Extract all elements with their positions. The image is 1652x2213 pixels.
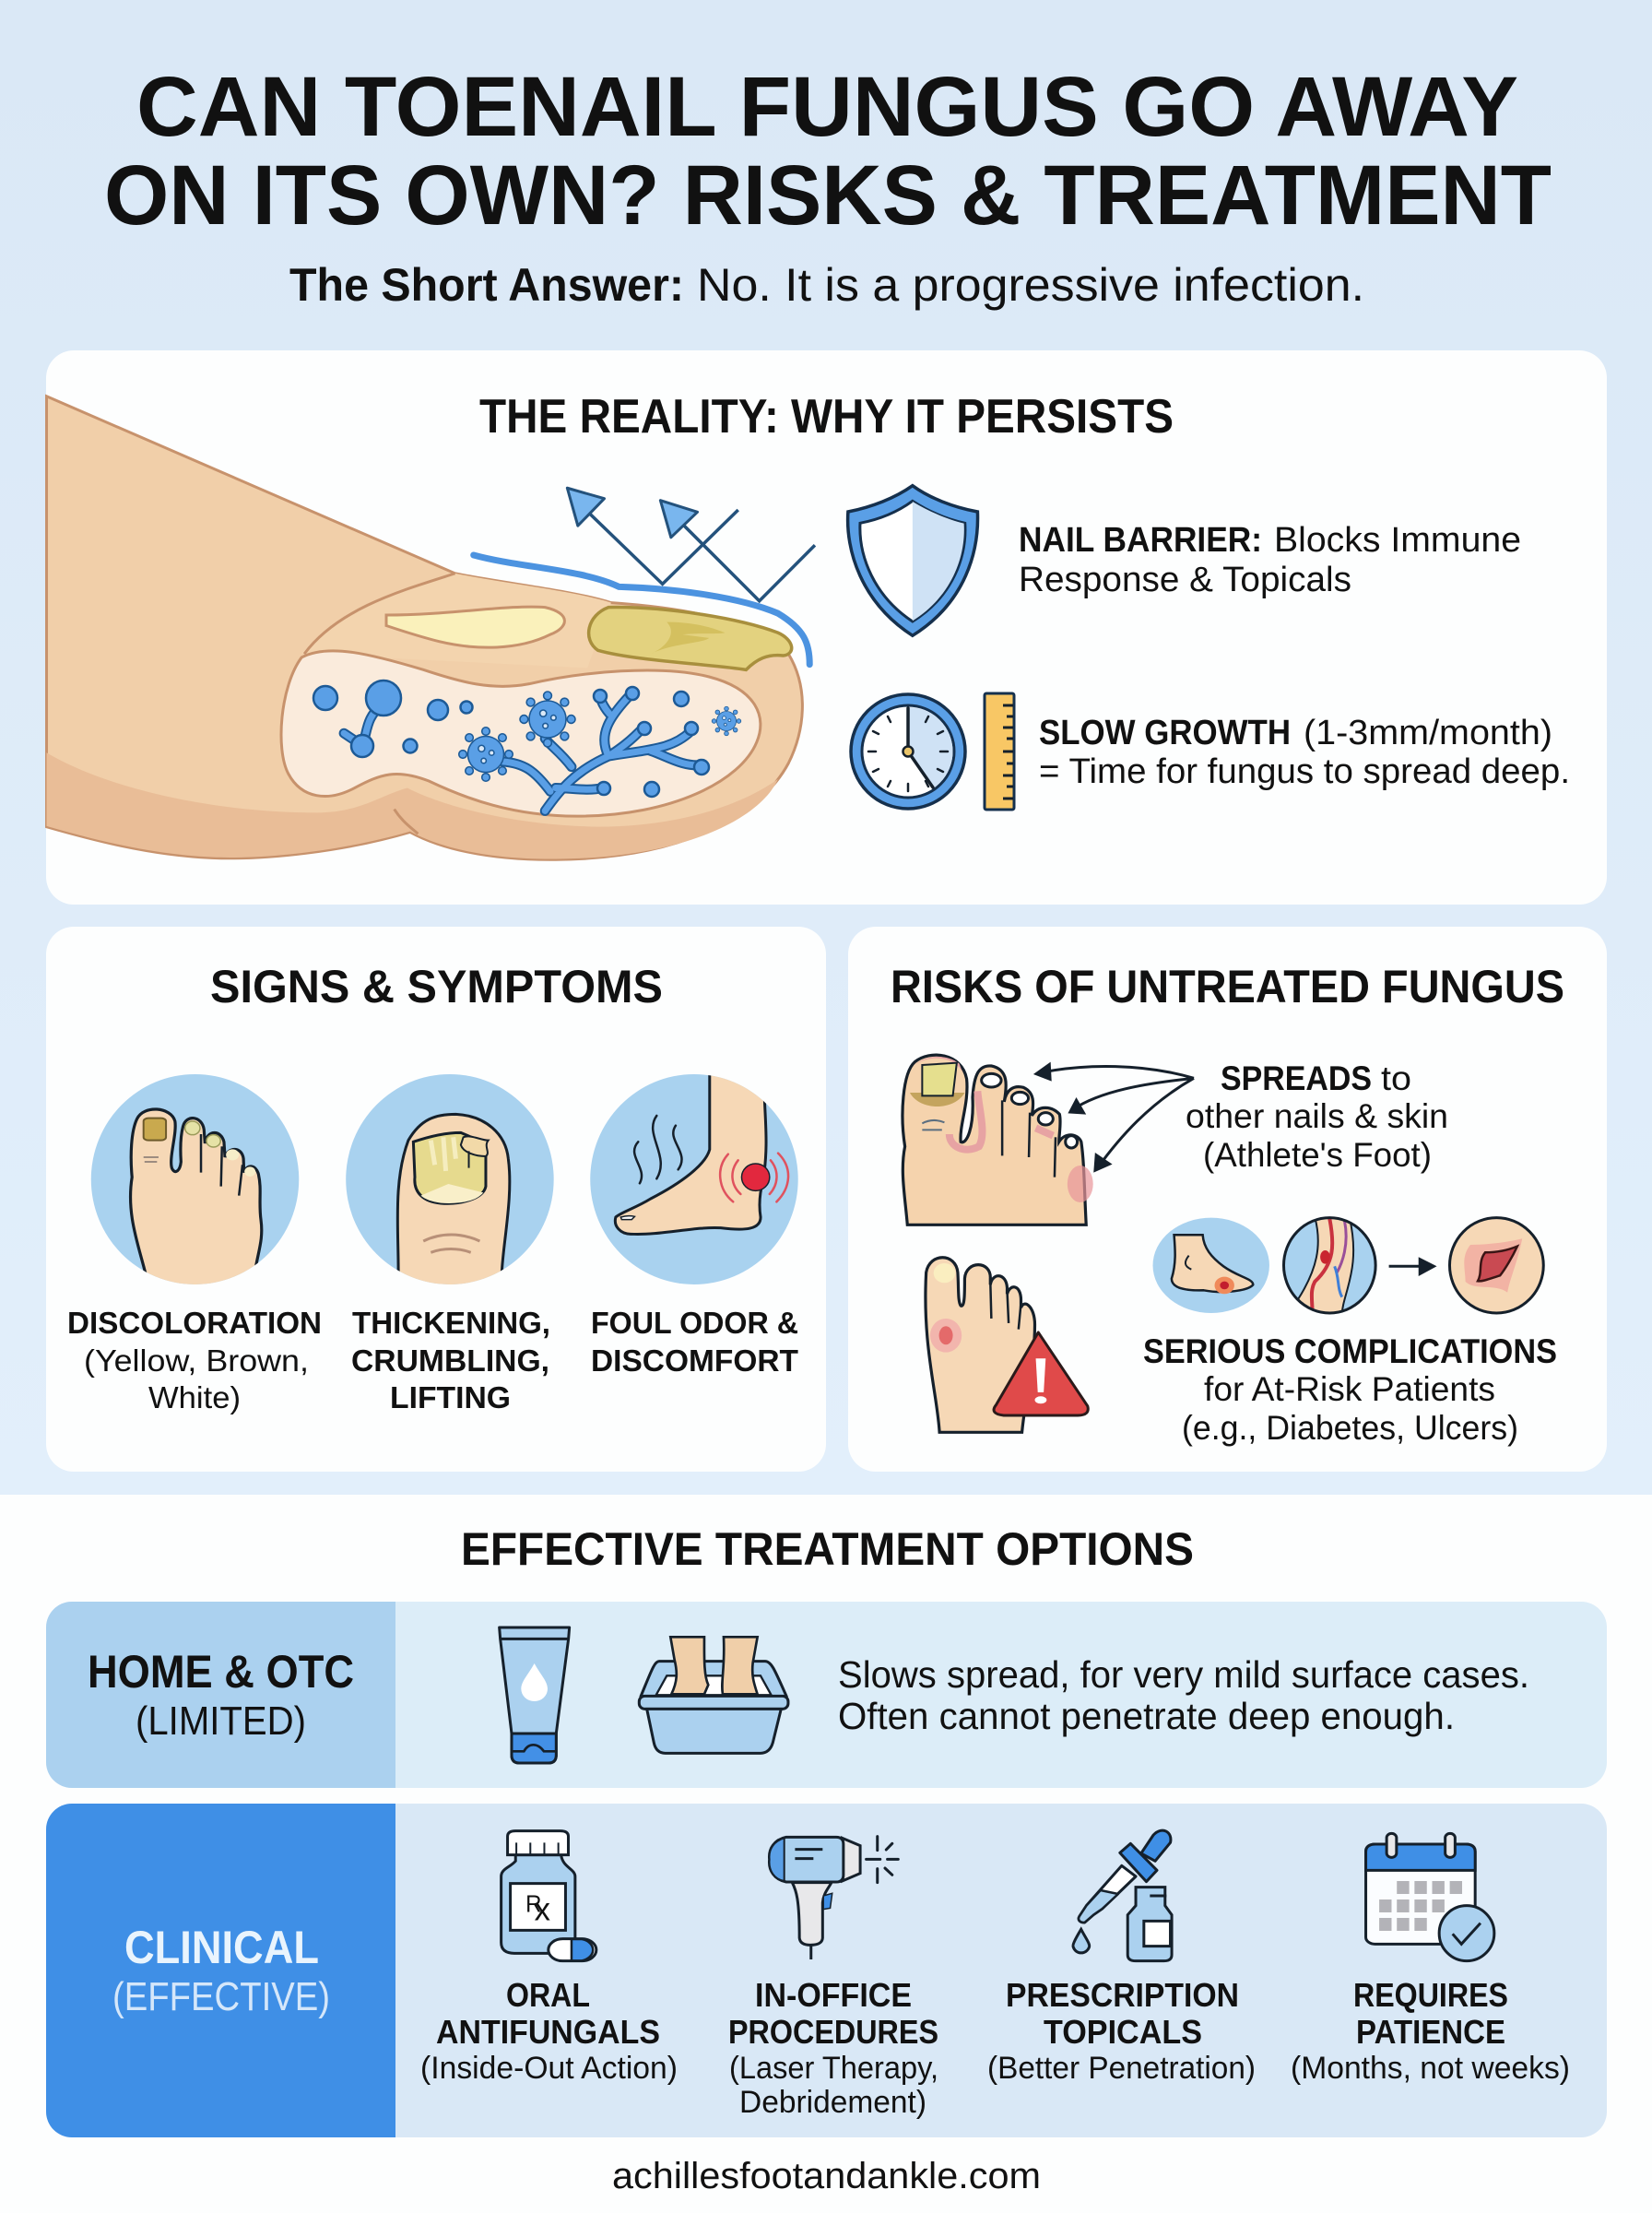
row: clinical	[46, 1804, 1607, 2137]
label: foul odor: FOUL ODOR &	[591, 1306, 798, 1340]
label: in-office procedures: (Laser Therapy,	[729, 2051, 938, 2086]
text: nail barrier: NAIL BARRIER:	[1019, 521, 1262, 560]
icon: prescription bottle: x	[535, 1891, 550, 1927]
text: slow growth: SLOW GROWTH	[1039, 714, 1291, 752]
title: ON ITS OWN? RISKS & TREATMENT	[104, 148, 1552, 243]
icon: discolored toes	[91, 1074, 299, 1288]
label: prescription topicals: PRESCRIPTION	[1006, 1976, 1239, 2014]
label: foul odor: DISCOMFORT	[591, 1343, 798, 1378]
text: spreads: to	[1381, 1059, 1411, 1097]
heading: signs and symptoms: SIGNS & SYMPTOMS	[210, 961, 663, 1012]
text: nail barrier: Response & Topicals	[1019, 561, 1351, 599]
icons: foot ulcer, vessels, wound progression	[1153, 1217, 1543, 1316]
icon: prescription bottle: R	[525, 1891, 541, 1917]
text: nail barrier: Blocks Immune	[1274, 521, 1521, 560]
text: home treatment description	[838, 1653, 1529, 1737]
label: oral antifungals: ORAL	[506, 1976, 590, 2014]
label: oral antifungals: ANTIFUNGALS	[436, 2013, 660, 2051]
text: slow growth: (1-3mm/month)	[1304, 714, 1552, 752]
lower white section background	[0, 1495, 1652, 2213]
text: home treatment description: Slows spread, for very mild surface cases.	[838, 1653, 1529, 1696]
text: serious complications: SERIOUS COMPLICATIONS	[1143, 1332, 1557, 1370]
label: requires patience	[1291, 1976, 1570, 2086]
label: oral antifungals: (Inside-Out Action)	[420, 2051, 678, 2086]
panel: risks of untreated fungus	[848, 927, 1607, 1472]
icon: dropper and bottle	[1073, 1830, 1172, 1961]
label: prescription topicals: (Better Penetration)	[987, 2051, 1256, 2086]
label: foul odor	[591, 1306, 798, 1378]
page background	[0, 0, 1652, 1498]
text: spreads	[1186, 1059, 1448, 1174]
text: spreads: (Athlete's Foot)	[1203, 1136, 1432, 1174]
text: spreads: other nails & skin	[1186, 1097, 1448, 1135]
label: thickening	[351, 1306, 550, 1414]
heading: the reality: THE REALITY: WHY IT PERSISTS	[479, 390, 1174, 444]
text: serious complications	[1143, 1332, 1557, 1447]
subtitle: short answer: The Short Answer:	[289, 259, 684, 311]
label: prescription topicals: TOPICALS	[1044, 2013, 1202, 2051]
text: slow growth	[1039, 714, 1570, 791]
panel: signs and symptoms	[46, 927, 826, 1472]
label: in-office procedures: PROCEDURES	[728, 2013, 938, 2051]
icon: foot with odor and heel pain	[590, 1067, 798, 1284]
label: in-office procedures: Debridement)	[739, 2085, 926, 2120]
label: in-office procedures	[728, 1976, 938, 2120]
text: serious complications: (e.g., Diabetes, Ulcers)	[1182, 1409, 1518, 1447]
label: oral antifungals	[420, 1976, 678, 2086]
label: requires patience: PATIENCE	[1356, 2013, 1505, 2051]
row: home and OTC	[46, 1602, 1607, 1788]
label: requires patience: REQUIRES	[1353, 1976, 1508, 2014]
icon: at-risk foot with warning triangle	[926, 1258, 1088, 1432]
label: thickening: THICKENING,	[352, 1306, 550, 1340]
label: discoloration: DISCOLORATION	[67, 1306, 322, 1340]
label: home and OTC: HOME & OTC	[88, 1646, 354, 1698]
heading: risks: RISKS OF UNTREATED FUNGUS	[891, 961, 1564, 1012]
label: clinical: (EFFECTIVE)	[112, 1974, 330, 2019]
heading: effective treatment options: EFFECTIVE TREATMENT OPTIONS	[461, 1523, 1194, 1575]
title: CAN TOENAIL FUNGUS GO AWAY	[136, 60, 1518, 154]
footer website: achillesfootandankle.com	[612, 2156, 1041, 2196]
icon: infected toes with spread arrows	[903, 1055, 1194, 1225]
icon: shield	[848, 486, 978, 635]
subtitle: short answer	[289, 259, 1364, 311]
icon: clock	[851, 694, 965, 809]
label: clinical: CLINICAL	[124, 1922, 319, 1973]
text: nail barrier	[1019, 521, 1521, 599]
title	[104, 60, 1552, 243]
icon: foot soak basin	[639, 1637, 788, 1753]
icon: laser device	[769, 1837, 898, 1959]
text: serious complications: for At-Risk Patients	[1204, 1370, 1495, 1408]
icon: calendar with check	[1366, 1833, 1494, 1961]
subtitle: short answer: No. It is a progressive infection.	[697, 259, 1364, 311]
icon: thickened nail	[346, 1074, 554, 1288]
text: home treatment description: Often cannot penetrate deep enough.	[838, 1695, 1455, 1737]
label: discoloration: White)	[148, 1380, 241, 1414]
label: in-office procedures: IN-OFFICE	[755, 1976, 912, 2014]
icon: prescription bottle	[502, 1831, 596, 1961]
label: discoloration: (Yellow, Brown,	[84, 1343, 309, 1378]
label: thickening: CRUMBLING,	[351, 1343, 549, 1378]
icon: cream tube	[500, 1627, 570, 1763]
label: thickening: LIFTING	[390, 1380, 511, 1414]
panel: the reality, why it persists	[46, 350, 1607, 905]
label: requires patience: (Months, not weeks)	[1291, 2051, 1570, 2086]
label: home and OTC	[88, 1646, 354, 1744]
label: home and OTC: (LIMITED)	[136, 1698, 306, 1744]
text: slow growth: = Time for fungus to spread deep.	[1039, 752, 1570, 791]
label: prescription topicals	[987, 1976, 1256, 2086]
icon: ruler	[985, 693, 1014, 810]
label: clinical	[112, 1922, 330, 2019]
illustration: toe cross-section with fungus	[47, 396, 815, 859]
label: discoloration	[67, 1306, 322, 1414]
text: spreads: SPREADS	[1221, 1059, 1372, 1097]
